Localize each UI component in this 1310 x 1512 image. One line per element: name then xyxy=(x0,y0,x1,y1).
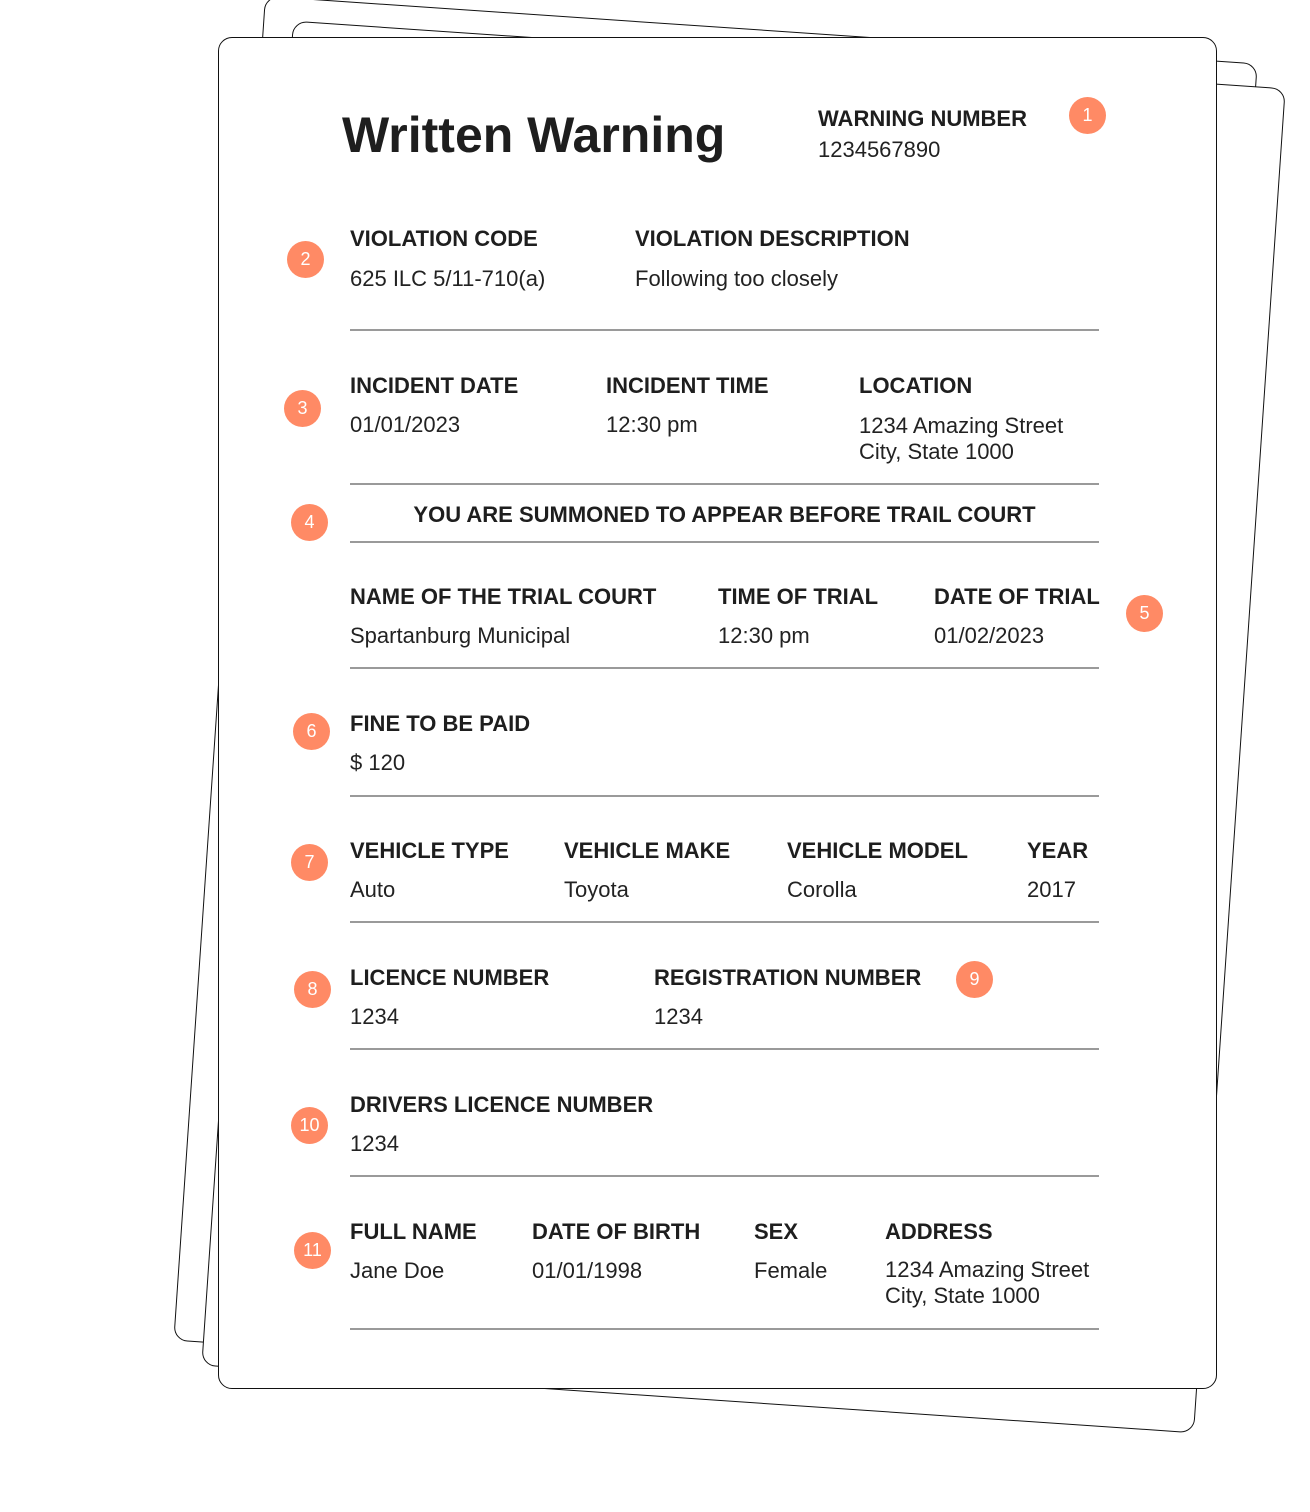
field: licence number: LICENCE NUMBER xyxy=(350,965,549,990)
field: sex: Female xyxy=(754,1258,827,1283)
badge 4: 4 xyxy=(304,512,314,532)
field: sex xyxy=(754,1219,827,1283)
field: date of trial: 01/02/2023 xyxy=(934,623,1044,648)
field: vehicle make xyxy=(564,838,730,902)
field: incident date: INCIDENT DATE xyxy=(350,373,518,398)
badge 3 xyxy=(284,390,321,427)
field: drivers licence xyxy=(350,1092,653,1156)
badge 10: 10 xyxy=(299,1115,320,1135)
badge 4 xyxy=(291,504,328,541)
field: date of birth: 01/01/1998 xyxy=(532,1258,642,1283)
field: address: 1234 Amazing Street xyxy=(885,1257,1089,1282)
field: year xyxy=(1027,838,1088,902)
field: year: YEAR xyxy=(1027,838,1088,863)
field: time of trial xyxy=(718,584,878,648)
field: date of birth: DATE OF BIRTH xyxy=(532,1219,700,1244)
field: trial court: NAME OF THE TRIAL COURT xyxy=(350,584,656,609)
badge 11: 11 xyxy=(303,1240,322,1260)
field: fine: FINE TO BE PAID xyxy=(350,711,530,736)
field: date of trial: DATE OF TRIAL xyxy=(934,584,1100,609)
field: full name: FULL NAME xyxy=(350,1219,477,1244)
field: location: 1234 Amazing Street xyxy=(859,413,1063,438)
field: trial court xyxy=(350,584,656,648)
front page: written warning form xyxy=(218,37,1217,1389)
field: vehicle make: Toyota xyxy=(564,877,629,902)
badge 9: 9 xyxy=(969,969,980,989)
field: date of trial xyxy=(934,584,1100,648)
field: incident time xyxy=(606,373,769,437)
field: licence number xyxy=(350,965,549,1029)
badge 10 xyxy=(291,1107,328,1144)
field: vehicle type: VEHICLE TYPE xyxy=(350,838,509,863)
field: warning number xyxy=(818,106,1027,162)
field: address: City, State 1000 xyxy=(885,1283,1040,1308)
title: Written Warning xyxy=(342,107,725,163)
field: incident time: INCIDENT TIME xyxy=(606,373,769,398)
field: location xyxy=(859,373,1064,464)
field: vehicle model: VEHICLE MODEL xyxy=(787,838,968,863)
field: incident date xyxy=(350,373,518,437)
field: violation code xyxy=(350,226,545,291)
field: licence number: 1234 xyxy=(350,1004,399,1029)
badge 5 xyxy=(1126,595,1163,632)
badge 2: 2 xyxy=(300,249,310,269)
field: address: ADDRESS xyxy=(885,1219,993,1244)
field: fine: $ 120 xyxy=(350,750,405,775)
field: registration number xyxy=(654,965,921,1029)
badge 8 xyxy=(294,971,331,1008)
field: vehicle type: Auto xyxy=(350,877,395,902)
field: violation description: VIOLATION DESCRIPTION xyxy=(635,226,910,251)
field: registration number: 1234 xyxy=(654,1004,703,1029)
field: fine xyxy=(350,711,530,775)
badge 1: 1 xyxy=(1082,105,1092,125)
field: sex: SEX xyxy=(754,1219,798,1244)
badge 8: 8 xyxy=(307,979,318,999)
field: warning number: 1234567890 xyxy=(818,137,940,162)
badge 7: 7 xyxy=(304,852,314,872)
badge 3: 3 xyxy=(297,398,308,418)
field: time of trial: 12:30 pm xyxy=(718,623,810,648)
field: incident time: 12:30 pm xyxy=(606,412,698,437)
field: trial court: Spartanburg Municipal xyxy=(350,623,570,648)
field: year: 2017 xyxy=(1027,877,1076,902)
back page 1 xyxy=(173,0,1258,1408)
badge 9 xyxy=(956,961,993,998)
field: drivers licence: DRIVERS LICENCE NUMBER xyxy=(350,1092,653,1117)
badge 6 xyxy=(293,713,330,750)
field: vehicle make: VEHICLE MAKE xyxy=(564,838,730,863)
field: incident date: 01/01/2023 xyxy=(350,412,460,437)
field: vehicle model: Corolla xyxy=(787,877,857,902)
badge 11 xyxy=(294,1232,331,1269)
badge 7 xyxy=(291,844,328,881)
field: time of trial: TIME OF TRIAL xyxy=(718,584,878,609)
summons notice: YOU ARE SUMMONED TO APPEAR BEFORE TRAIL COURT xyxy=(413,502,1036,527)
field: registration number: REGISTRATION NUMBER xyxy=(654,965,921,990)
back page 2 xyxy=(201,21,1286,1433)
field: violation description xyxy=(635,226,910,291)
field: violation description: Following too closely xyxy=(635,266,838,291)
field: full name: Jane Doe xyxy=(350,1258,444,1283)
badge 2 xyxy=(287,241,324,278)
field: date of birth xyxy=(532,1219,700,1283)
field: violation code: VIOLATION CODE xyxy=(350,226,538,251)
field: full name xyxy=(350,1219,477,1283)
field: location: LOCATION xyxy=(859,373,972,398)
field: drivers licence: 1234 xyxy=(350,1131,399,1156)
field: address xyxy=(885,1219,1090,1308)
field: location: City, State 1000 xyxy=(859,439,1014,464)
badge 5: 5 xyxy=(1139,603,1150,623)
field: vehicle type xyxy=(350,838,509,902)
badge 6: 6 xyxy=(306,721,316,741)
field: vehicle model xyxy=(787,838,968,902)
badge 1 xyxy=(1069,97,1106,134)
field: warning number: WARNING NUMBER xyxy=(818,106,1027,131)
field: violation code: 625 ILC 5/11-710(a) xyxy=(350,266,545,291)
